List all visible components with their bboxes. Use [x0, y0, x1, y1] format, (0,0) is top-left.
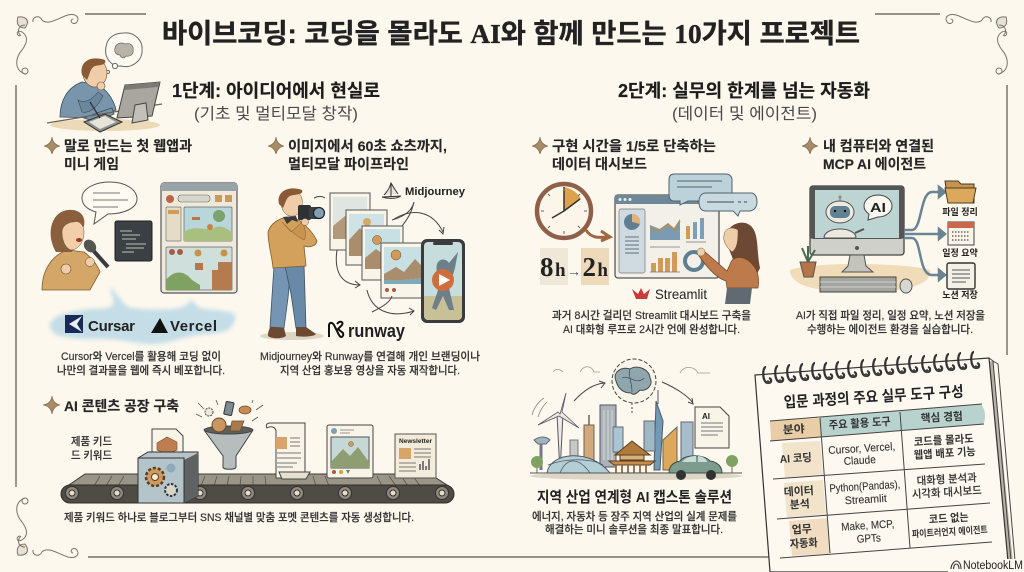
heading: web app: 말로 만드는 첫 웹앱과	[64, 138, 192, 154]
icon: woman with microphone	[42, 182, 137, 290]
heading: factory: AI 콘텐츠 공장 구축	[64, 398, 179, 414]
panel: capstone solution	[530, 359, 742, 536]
vercel wordmark: Vercel	[170, 318, 217, 335]
description: web app: 나만의 결과물을 웹에 즉시 베포합니다.	[57, 363, 225, 377]
label: notion save: 노션 저장	[942, 289, 979, 300]
table row: data analysis	[783, 470, 982, 512]
subheading: stage 1: (기초 및 멀티모달 창작)	[194, 105, 358, 123]
icon: man thinking at computer	[47, 33, 162, 132]
cursor wordmark: Cursar	[88, 318, 135, 335]
table row: work automation	[789, 511, 988, 551]
table row: work automation: GPTs	[856, 532, 882, 546]
icon: computer with robot: AI	[870, 200, 886, 215]
panel: MCP AI agent	[790, 137, 985, 336]
icon: game browser	[161, 183, 237, 293]
heading: MCP agent: 내 컴퓨터와 연결된	[823, 138, 934, 154]
icon: photographer	[260, 188, 324, 340]
arrows: agent connections	[904, 187, 945, 280]
icon: chat bubbles	[669, 174, 757, 216]
heading: MCP agent: MCP AI 에이전트	[823, 156, 926, 172]
conveyor belt	[61, 474, 454, 503]
logo: streamlit: Streamlit	[655, 286, 707, 302]
heading: stage 1: 1단계: 아이디어에서 현실로	[172, 81, 380, 101]
table row: data analysis: Python(Pandas),	[829, 479, 901, 495]
icon: code window	[115, 221, 152, 261]
table header row: 분야	[782, 421, 805, 437]
icon: midjourney logo: Midjourney	[405, 186, 466, 198]
table row: AI coding: Claude	[843, 454, 876, 468]
arrows: capstone flow	[574, 381, 693, 404]
table row: work automation: Make, MCP,	[841, 518, 895, 534]
arrows: pipeline flow	[314, 196, 444, 315]
icon: woman presenting	[697, 223, 760, 304]
table row: AI coding: 웹앱 배포 기능	[913, 444, 976, 462]
logo: runway	[329, 321, 405, 341]
subheading: stage 2: (데이터 및 에이전트)	[672, 105, 817, 123]
icon: newsletter	[395, 434, 436, 478]
icon: newsletter: Newsletter	[399, 438, 432, 445]
label: file organize: 파일 정리	[942, 206, 978, 217]
table row: AI coding: AI 코딩	[779, 451, 812, 466]
heading: dashboard: 구현 시간을 1/5로 단축하는	[552, 138, 716, 154]
table row: data analysis: Streamlit	[844, 493, 887, 507]
icon: cursor logo	[65, 315, 83, 333]
table row: AI coding: Cursor, Vercel,	[828, 441, 896, 457]
panel: AI content factory	[43, 396, 454, 524]
icon: keyword paper and gear machine	[138, 429, 198, 503]
description: pipeline: 지역 산업 홍보용 영상을 자동 재작합니다.	[280, 363, 460, 377]
table row: work automation: 업무	[791, 522, 812, 537]
description: MCP agent	[796, 308, 985, 336]
table row: data analysis: 대화형 분석과	[916, 470, 977, 488]
description: dashboard	[552, 308, 751, 336]
table	[770, 404, 992, 558]
icon: folder	[942, 181, 978, 217]
icon: notes	[942, 263, 979, 300]
icon: funnel	[196, 400, 263, 469]
panel: web app and mini game	[42, 137, 237, 377]
icon: calendar	[942, 222, 978, 258]
label: product keyword	[71, 435, 112, 462]
heading: pipeline: 멀티모달 파이프라인	[288, 156, 409, 172]
table row: data analysis: 시각화 대시보드	[911, 483, 982, 501]
icon: sparkle	[44, 137, 60, 154]
heading: capstone: 지역 산업 연계형 AI 캡스톤 솔루션	[537, 489, 732, 506]
icon: phone with video	[421, 239, 465, 323]
table header row: 주요 활용 도구	[828, 414, 891, 432]
table row: data analysis: 데이터	[783, 483, 814, 499]
callout: 8h to 2h: 8h→2h	[540, 252, 608, 282]
description: dashboard: 과거 8시간 걸리던 Streamlit 대시보드 구축을	[552, 308, 751, 322]
panel: data dashboard	[532, 137, 760, 336]
table row: work automation: 파이트러언지 에이전트	[912, 524, 988, 540]
heading: pipeline	[288, 138, 447, 172]
title: 바이브코딩: 코딩을 몰라도 AI와 함께 만드는 10가지 프로젝트	[162, 19, 860, 49]
description: pipeline: Midjourney와 Runway를 연결해 개인 브랜딩이나	[260, 349, 480, 363]
logo: streamlit	[632, 286, 707, 302]
icon: dashboard window	[615, 195, 719, 278]
heading: dashboard: 데이터 대시보드	[552, 156, 647, 172]
icon: sparkle	[802, 137, 818, 154]
heading: dashboard	[552, 138, 716, 172]
description: web app: Cursor와 Vercel를 활용해 코딩 없이	[61, 349, 221, 363]
table cell shading	[770, 404, 985, 556]
icon: sparkle	[268, 137, 284, 154]
table row: data analysis: 분석	[789, 497, 810, 512]
icon: report document	[695, 407, 729, 448]
table row: work automation: 자동화	[789, 535, 818, 551]
description: capstone	[532, 509, 737, 536]
description: MCP agent: 수행하는 에이전트 환경을 실습합니다.	[807, 322, 973, 336]
icon: computer with robot	[790, 186, 930, 293]
description: capstone: 에너지, 자동차 등 장주 지역 산업의 실계 문제를	[532, 509, 737, 523]
icon: vercel logo	[151, 318, 168, 333]
table header row: 핵심 경험	[920, 409, 963, 425]
icon: blog scroll	[266, 423, 310, 479]
table row: AI coding	[779, 432, 976, 468]
icon: brain in dashed circle	[612, 359, 656, 414]
description: web app	[57, 349, 225, 377]
table header row	[782, 409, 963, 437]
panel: stage 1 header	[47, 33, 380, 132]
logos: Cursar and Vercel	[50, 287, 235, 344]
icon: clock	[537, 184, 610, 241]
description: dashboard: AI 대화형 루프로 2시간 언에 완성합니다.	[563, 322, 740, 336]
heading: web app: 미니 게임	[64, 156, 119, 172]
description: pipeline	[260, 349, 480, 377]
panel: multimodal pipeline	[260, 137, 480, 377]
heading: web app	[64, 138, 192, 172]
table lines	[770, 404, 992, 558]
label: schedule summary: 일정 요약	[942, 247, 978, 258]
illustration: city with brain and document	[530, 367, 742, 480]
icon: sparkle	[43, 396, 60, 414]
icon: sparkle	[532, 137, 548, 154]
icon: social post card	[327, 425, 373, 478]
icon: photo stack	[330, 193, 423, 298]
label: product keyword: 제품 키드	[71, 435, 112, 448]
icon: report document: AI	[702, 412, 710, 421]
heading: stage 2: 2단계: 실무의 한계를 넘는 자동화	[618, 81, 870, 101]
description: MCP agent: AI가 직접 파일 정리, 일정 요약, 노션 저장을	[796, 308, 985, 322]
logo: runway: runway	[348, 321, 405, 341]
panel: notebook tools table	[755, 352, 1016, 572]
notebook paper	[755, 352, 1016, 572]
table row: work automation: 코드 없는	[928, 511, 969, 526]
notebook title: 입문 과정의 주요 실무 도구 구성	[783, 384, 964, 411]
heading: MCP agent	[823, 138, 934, 172]
icon: midjourney logo	[382, 183, 466, 198]
description: factory: 제품 키워드 하나로 블로그부터 SNS 채널별 맞춤 포멧 콘텐츠를 자동 생성합니다.	[64, 510, 414, 524]
description: capstone: 해결하는 미니 솔루션을 최종 말표합니다.	[545, 522, 723, 536]
panel: stage 2 header	[618, 81, 870, 123]
label: product keyword: 드 키워드	[71, 449, 112, 462]
table row: AI coding: 코드를 몰라도	[913, 432, 974, 449]
heading: pipeline: 이미지에서 60초 쇼츠까지,	[288, 138, 447, 154]
